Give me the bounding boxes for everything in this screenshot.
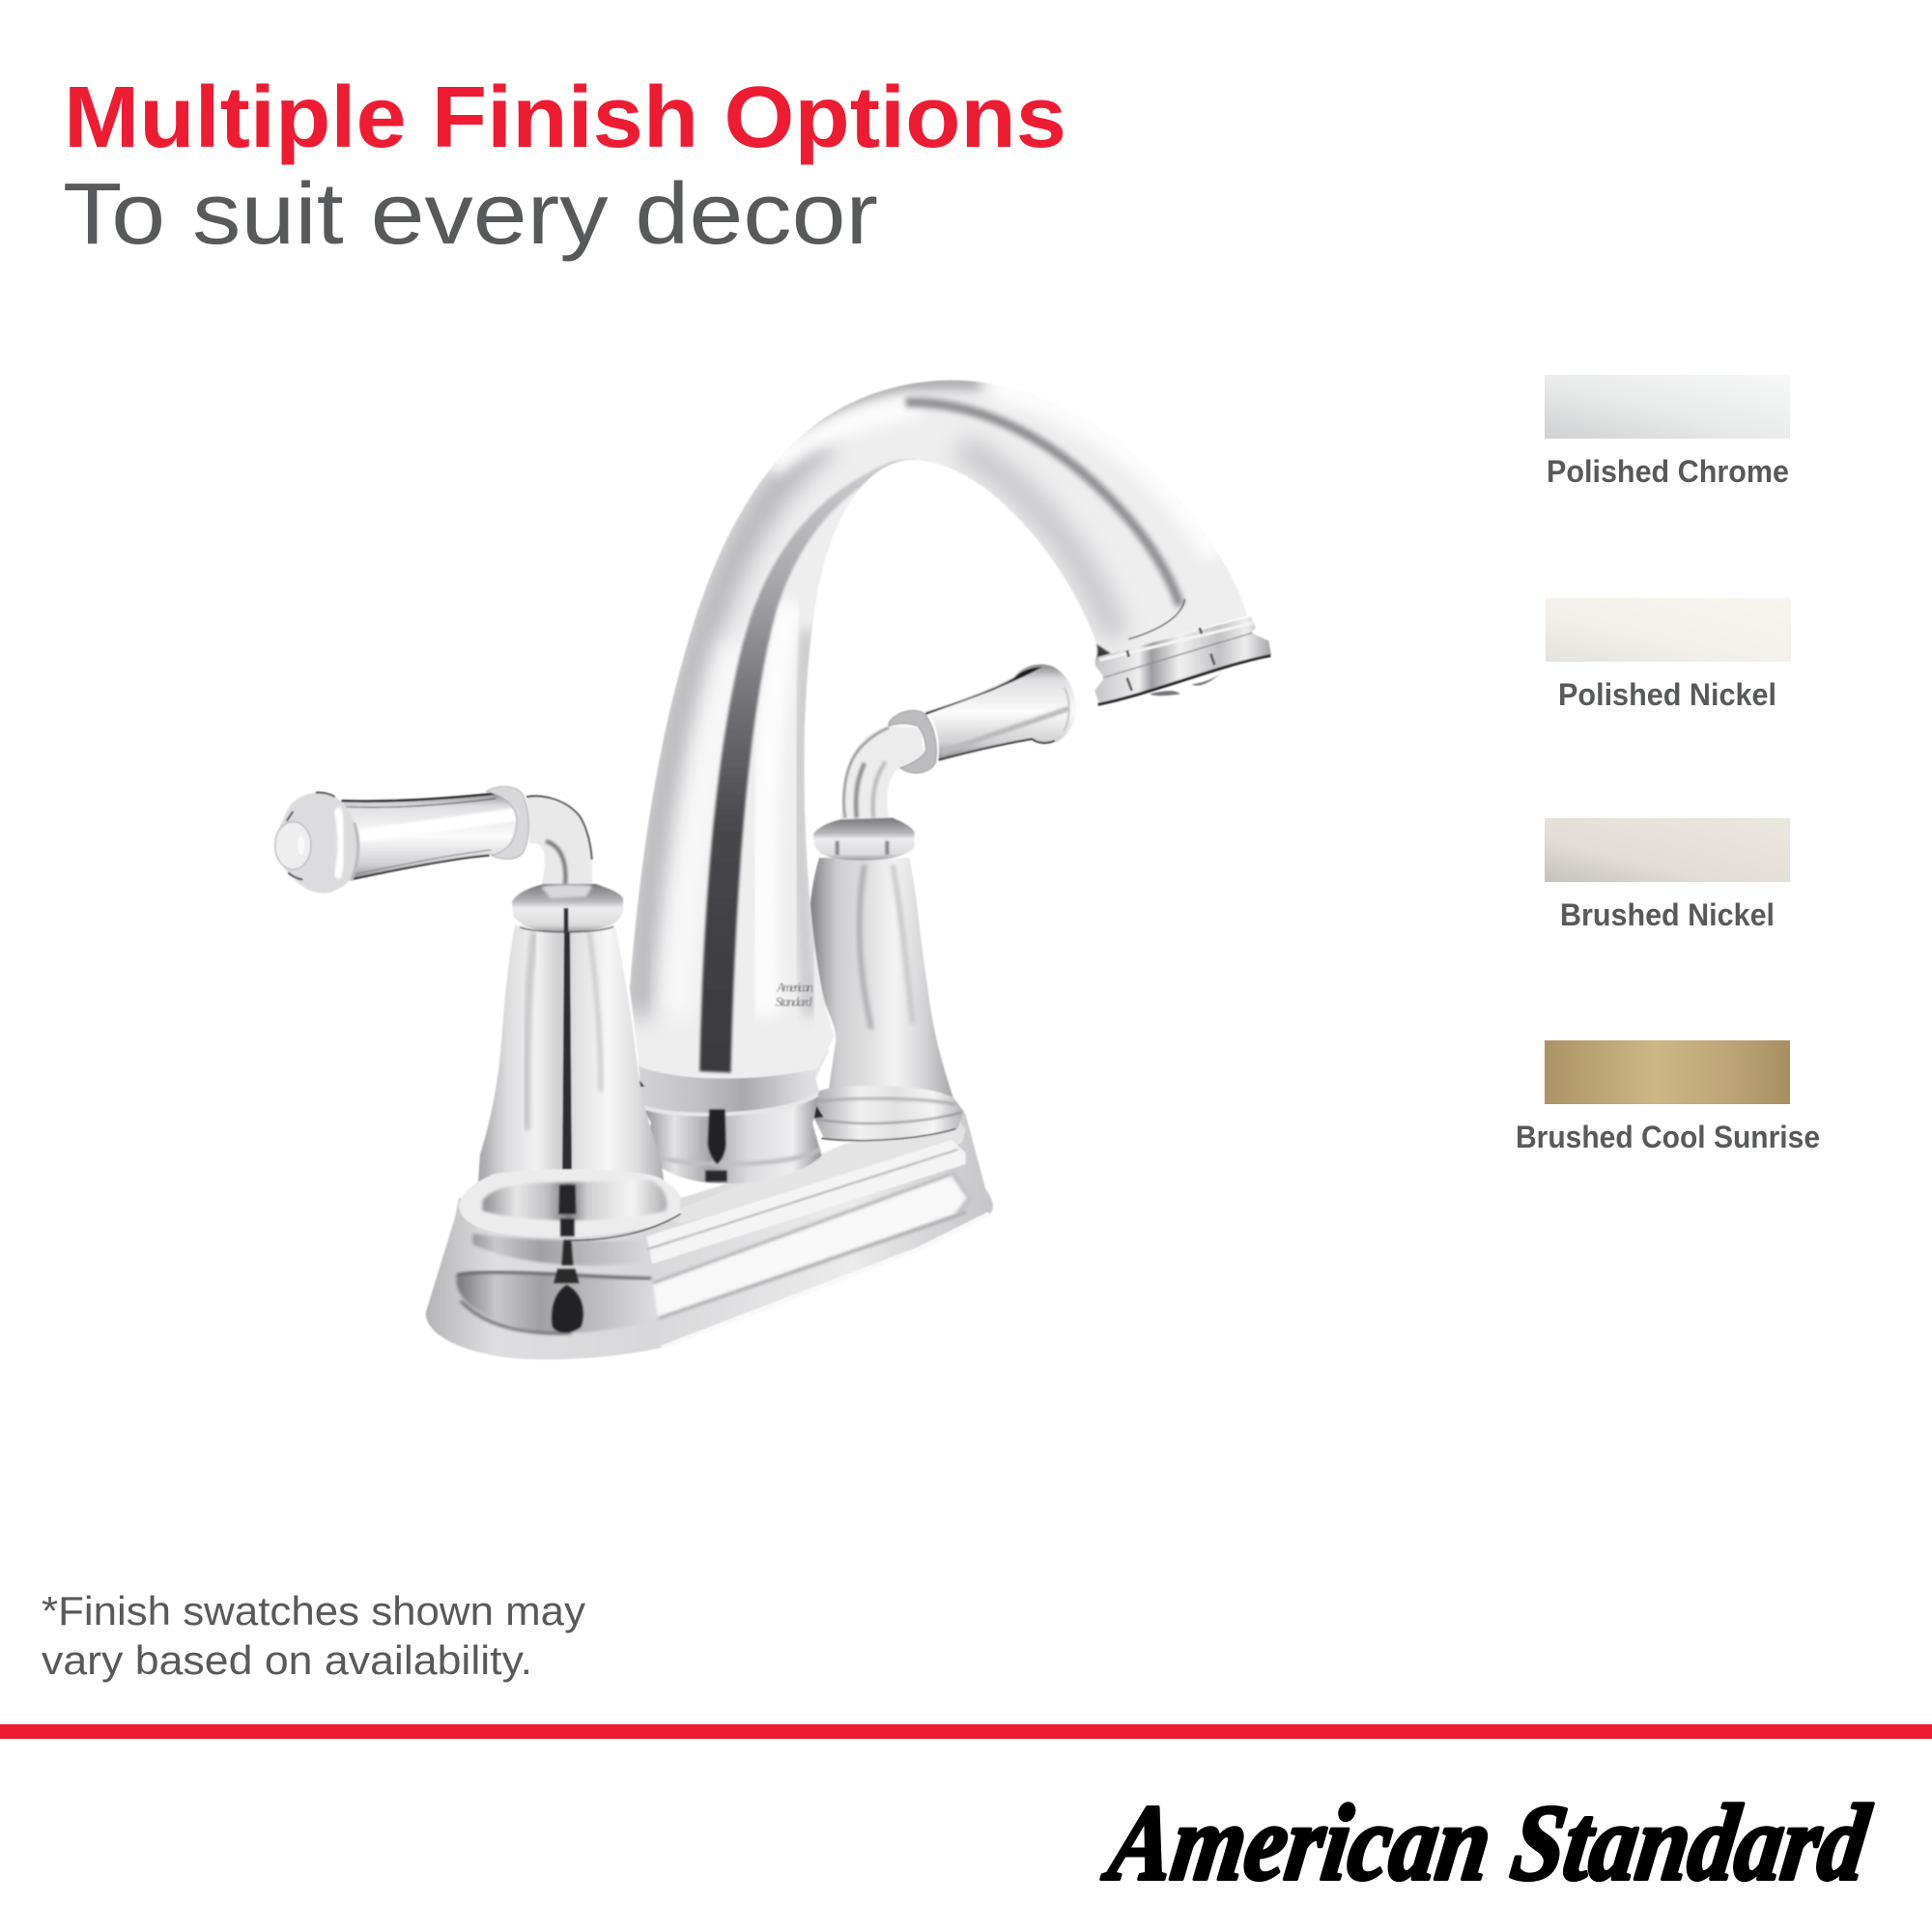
footnote (42, 1588, 585, 1683)
faucet product illustration (275, 381, 1271, 1359)
swatch: Polished Nickel (1546, 598, 1791, 712)
subtitle: To suit every decor (63, 166, 878, 263)
red divider bar (0, 1724, 1932, 1739)
right handle lever (840, 665, 1076, 821)
right bell foot (813, 1086, 964, 1141)
left bell foot (459, 1169, 680, 1240)
left handle lever (341, 786, 592, 886)
spout (630, 381, 1247, 1079)
swatch: Brushed Nickel: Brushed Nickel (1560, 897, 1775, 932)
spout nozzle (1094, 599, 1271, 705)
spout engraved logo (776, 980, 813, 1009)
swatch: Brushed Nickel (1545, 818, 1790, 932)
footnote: vary based on availability. (42, 1637, 532, 1683)
left handle cap (512, 884, 623, 934)
spout reflections (638, 381, 1217, 1072)
base plate (425, 1096, 993, 1359)
title: Multiple Finish Options (64, 70, 1066, 166)
swatch: Polished Chrome (1545, 375, 1790, 489)
swatch: Polished Chrome: Polished Chrome (1547, 454, 1789, 489)
swatch: Polished Nickel: Polished Nickel (1558, 677, 1776, 712)
spout engraved logo: Standard (776, 995, 812, 1009)
swatch: Brushed Cool Sunrise: Brushed Cool Sunrise (1516, 1120, 1820, 1154)
spout engraved logo: American (776, 980, 813, 994)
left handle bell (477, 925, 667, 1198)
footnote: *Finish swatches shown may (42, 1588, 585, 1634)
left handle knob (275, 792, 359, 894)
right handle bell (810, 858, 954, 1101)
swatch: Brushed Cool Sunrise (1516, 1040, 1820, 1154)
right handle cap (813, 818, 915, 861)
spout collar (639, 1050, 830, 1183)
